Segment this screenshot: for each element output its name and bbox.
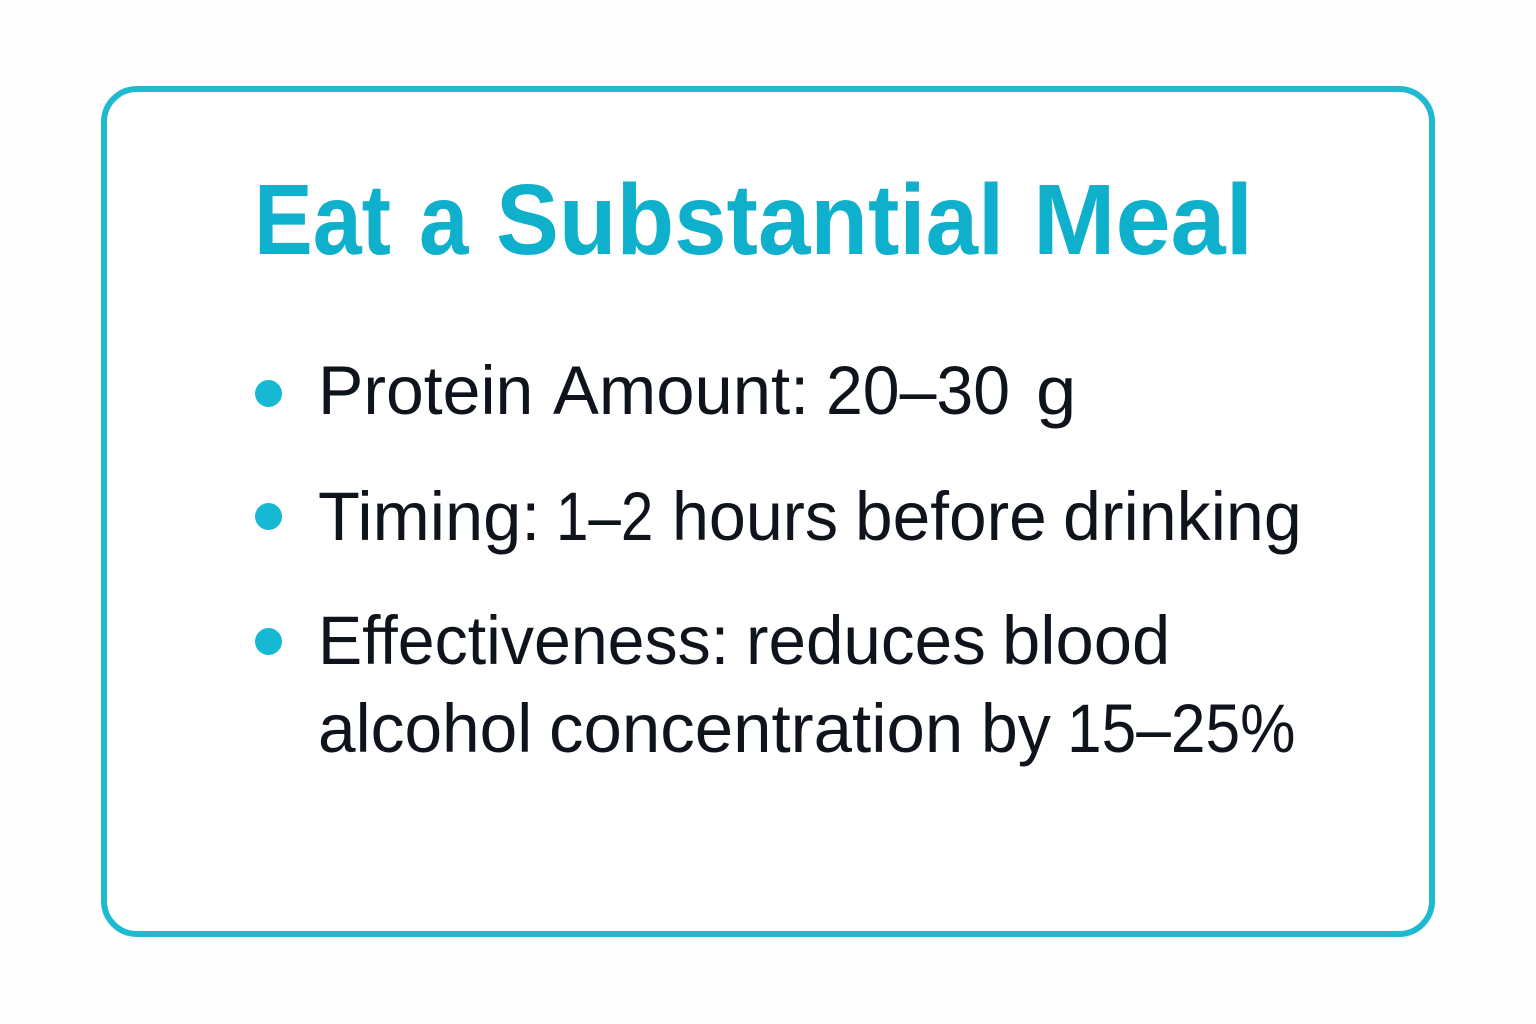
title: Substantial: [496, 164, 1004, 276]
text: effectiveness: by: [981, 690, 1051, 767]
text: protein amount: [318, 352, 1076, 429]
title: Eat: [254, 164, 391, 276]
text: effectiveness: blood: [1002, 602, 1170, 679]
text: effectiveness: [318, 602, 1295, 767]
text: effectiveness: Effectiveness:: [318, 602, 729, 679]
text: protein amount: g: [1036, 352, 1076, 429]
bullet icon: protein: [255, 380, 282, 407]
text: protein amount: Protein: [318, 352, 533, 429]
text: timing: drinking: [1063, 478, 1302, 555]
text: protein amount: Amount:: [553, 352, 809, 429]
bullet icon: effectiveness: [255, 628, 282, 655]
bullet icon: timing: [255, 503, 282, 530]
panel: rounded card: [101, 86, 1435, 937]
text: timing: before: [855, 478, 1047, 555]
text: protein amount: 20–30: [826, 352, 1010, 429]
title: a: [419, 164, 468, 276]
text: timing: Timing:: [318, 478, 540, 555]
text: timing: 1–2: [556, 478, 653, 555]
text: effectiveness: reduces: [746, 602, 986, 679]
title: [254, 164, 1253, 276]
text: effectiveness: concentration: [549, 690, 963, 767]
text: effectiveness: alcohol: [318, 690, 532, 767]
text: timing: hours: [672, 478, 838, 555]
text: effectiveness: 15–25%: [1067, 690, 1295, 767]
text: timing: [318, 478, 1302, 555]
title: Meal: [1033, 164, 1253, 276]
